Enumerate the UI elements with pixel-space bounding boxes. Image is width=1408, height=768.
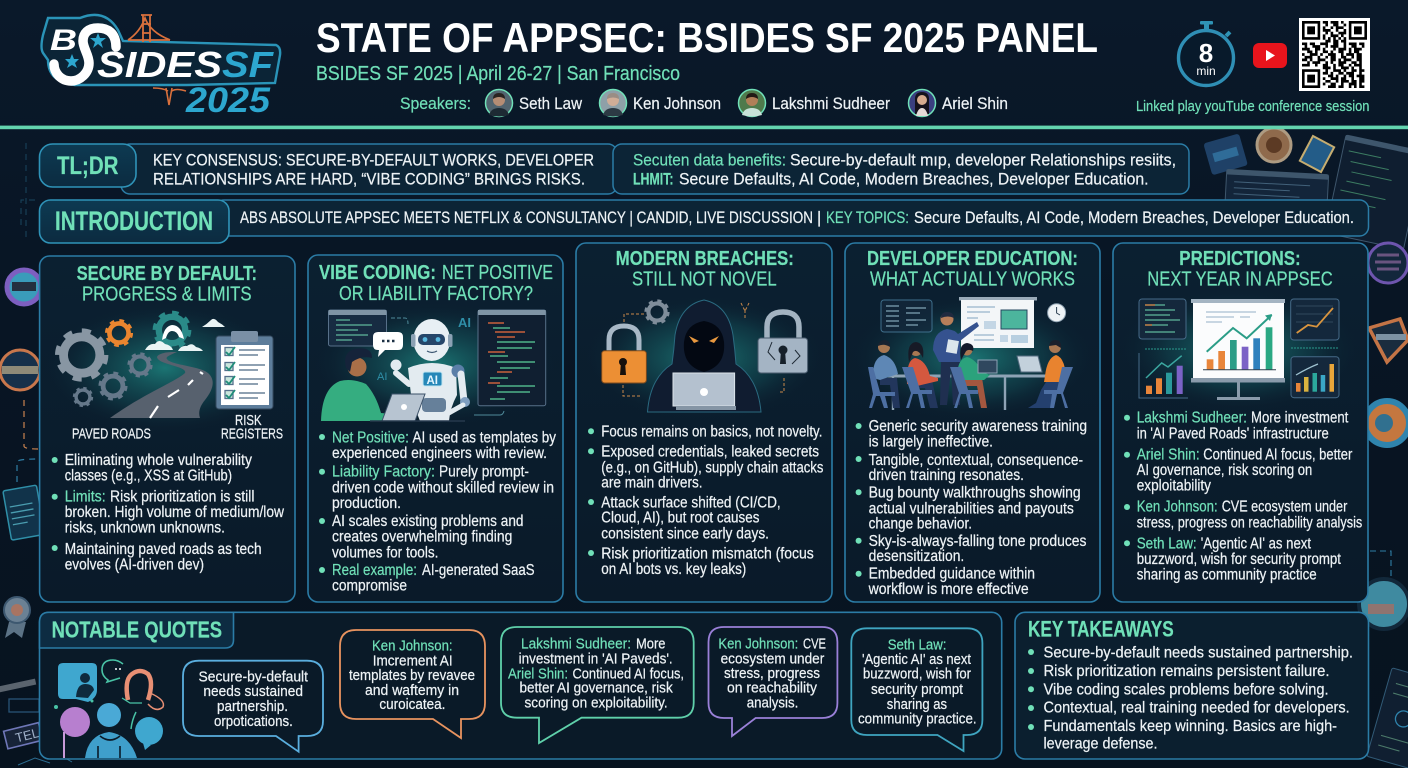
bullet list: predictions: 'Agentic AI' as next <box>1201 535 1312 552</box>
presenter <box>940 358 960 405</box>
quote bubble: Ken Johnson on CVE: ecosystem under <box>721 650 824 667</box>
TL;DR secondary box <box>613 144 1189 194</box>
bullet list: vibe coding: AI used as templates by <box>412 430 556 447</box>
TL;DR secondary box: LHMIT: <box>633 170 674 188</box>
quote bubble: Ken Johnson on CVE <box>708 627 837 736</box>
bullet list: predictions: exploitability <box>1137 478 1211 495</box>
bullet list: vibe coding: driven code without skilled review in <box>332 480 554 497</box>
introduction body box: KEY TOPICS: <box>826 209 909 227</box>
bullet list: vibe coding: AI-generated SaaS <box>422 562 535 579</box>
bullet list: vibe coding: Real example: <box>332 562 417 579</box>
panel: notable quotes <box>40 612 1002 759</box>
bullet list: modern breaches <box>588 424 824 578</box>
quote bubble: Lakshmi Sudheer and Ariel Shin: Ariel Shin: <box>508 665 568 682</box>
bullet list: key takeaways: Secure-by-default needs sustained partnership. <box>1044 645 1353 662</box>
bullet list: secure by default: Limits: <box>65 489 106 506</box>
panel: introduction <box>40 200 1368 243</box>
speakers row <box>400 90 1008 116</box>
quote bubble: Lakshmi Sudheer and Ariel Shin: investment in 'AI Paveds'. <box>519 650 673 667</box>
icon: 8 minute stopwatch: min <box>1196 64 1216 78</box>
speakers row: Speakers: <box>400 94 471 113</box>
bullet list: predictions: buzzword, wish for security prompt <box>1137 551 1342 568</box>
quote bubble: secure by default <box>183 661 323 752</box>
quote bubble: Lakshmi Sudheer and Ariel Shin: scoring on exploitability. <box>524 695 668 712</box>
label: risk registers: REGISTERS <box>221 427 283 443</box>
bullet list: predictions: Seth Law: <box>1137 535 1197 552</box>
quote bubble: secure by default: needs sustained <box>203 683 303 700</box>
illustration: hooded attacker and broken locks <box>584 296 824 420</box>
heading: key takeaways: KEY TAKEAWAYS <box>1028 617 1174 642</box>
logo: BSides SF 2025: SIDES <box>97 44 222 85</box>
quote bubble: Seth Law: sharing as <box>887 696 947 713</box>
bullet list: secure by default: risks, unknown unknowns. <box>65 520 225 537</box>
panel: key takeaways <box>1015 612 1368 759</box>
TL;DR badge <box>40 144 136 187</box>
bullet list: developer education: Bug bounty walkthroughs showing <box>869 485 1081 502</box>
bullet list: secure by default: classes (e.g., XSS at GitHub) <box>65 468 232 485</box>
bullet list: developer education: Sky-is-always-falling tone produces <box>869 533 1087 550</box>
bullet list: predictions: in 'AI Paved Roads' infrastructure <box>1137 425 1329 442</box>
panel: predictions <box>1113 243 1368 602</box>
TL;DR secondary box: Secuten data benefits: <box>633 151 786 170</box>
heading tab: notable quotes: NOTABLE QUOTES <box>52 617 222 643</box>
introduction badge: INTRODUCTION <box>55 206 213 236</box>
speaker: Lakshmi Sudheer: Lakshmi Sudheer <box>772 94 890 113</box>
introduction body box: ABS ABSOLUTE APPSEC MEETS NETFLIX & CONSULTANCY | CANDID, LIVE DISCUSSION <box>240 209 813 227</box>
bullet list: modern breaches: on AI bots vs. key leaks) <box>601 561 746 578</box>
quote bubble: Seth Law: community practice. <box>858 711 977 728</box>
bullet list: developer education: Generic security awareness training <box>869 418 1087 435</box>
bullet list: secure by default: Risk prioritization is still <box>110 489 254 506</box>
bullet list: vibe coding: Net Positive: <box>332 430 409 447</box>
bullet list: developer education <box>856 418 1087 598</box>
heading: modern breaches <box>616 247 794 291</box>
bullet list: vibe coding: Purely prompt- <box>439 464 529 481</box>
decorative stickers: left margin: TEL <box>14 725 41 745</box>
quote bubble: Ken Johnson: curoicatea. <box>379 696 445 713</box>
quote bubble: secure by default: orpotications. <box>214 713 293 730</box>
heading: modern breaches: MODERN BREACHES: <box>616 247 794 270</box>
TL;DR secondary box: Secure Defaults, AI Code, Modern Breaches, Developer Education. <box>679 170 1148 188</box>
quote bubble: Ken Johnson on CVE: Ken Johnson: <box>718 635 798 652</box>
bullet list: predictions: More investment <box>1251 410 1349 427</box>
person 3 and chair <box>965 378 987 408</box>
heading: vibe coding: NET POSITIVE <box>442 261 553 284</box>
illustration: developer pairing with AI robot: AI <box>458 315 471 330</box>
bullet list: key takeaways: Risk prioritization remains persistent failure. <box>1044 663 1330 680</box>
heading: developer education: WHAT ACTUALLY WORKS <box>870 268 1075 291</box>
heading: predictions <box>1147 247 1333 291</box>
bullet list: developer education: desensitization. <box>869 548 964 565</box>
quote bubble: Ken Johnson on CVE: stress, progress <box>724 665 820 682</box>
bullet list: predictions: Ken Johnson: <box>1137 499 1218 516</box>
heading: predictions: PREDICTIONS: <box>1179 247 1301 270</box>
bullet list: secure by default <box>52 452 285 573</box>
TL;DR body box <box>121 144 617 194</box>
speaker: Lakshmi Sudheer <box>738 90 890 116</box>
bullet list: developer education: actual vulnerabilities and payouts <box>869 500 1074 517</box>
bullet list: key takeaways: leverage defense. <box>1044 735 1158 752</box>
quote bubble: secure by default: partnership. <box>217 698 288 715</box>
speaker: Ariel Shin <box>908 90 1008 116</box>
bullet list: developer education: workflow is more effective <box>868 581 1029 598</box>
illustration: gears, paved road and risk register clipboard <box>43 302 287 434</box>
heading: vibe coding: VIBE CODING: <box>319 261 436 284</box>
illustration: developer pairing with AI robot: AI <box>426 375 438 387</box>
label: paved roads: PAVED ROADS <box>72 427 151 443</box>
heading: developer education <box>867 247 1078 291</box>
illustration: developer pairing with AI robot <box>313 302 557 426</box>
quote bubble: Lakshmi Sudheer and Ariel Shin: Lakshmi Sudheer: <box>521 635 631 652</box>
bullet list: vibe coding: creates overwhelming finding <box>332 529 512 546</box>
speaker: Ariel Shin: Ariel Shin <box>942 94 1008 113</box>
QR code <box>1299 18 1370 91</box>
quote bubble: Ken Johnson: and waftemy in <box>365 682 459 699</box>
bullet list: modern breaches: Focus remains on basics, not novelty. <box>601 424 822 441</box>
speaker: Seth Law <box>486 90 583 116</box>
TL;DR body box: KEY CONSENSUS: SECURE-BY-DEFAULT WORKS, DEVELOPER <box>153 151 594 170</box>
decorative stickers: top right <box>1203 128 1408 249</box>
bullet list: predictions: sharing as community practice <box>1137 566 1317 583</box>
icon: 8 minute stopwatch: 8 <box>1199 38 1213 68</box>
bullet list: predictions: Continued AI focus, better <box>1203 446 1352 463</box>
bullet list: predictions <box>1124 410 1362 583</box>
bullet list: secure by default: broken. High volume of medium/low <box>65 504 285 521</box>
heading: developer education: DEVELOPER EDUCATION: <box>867 247 1078 270</box>
bullet list: modern breaches: are main drivers. <box>601 475 703 492</box>
bullet list: secure by default: Maintaining paved roads as tech <box>65 541 262 558</box>
panel: vibe coding <box>308 255 563 602</box>
bullet list: predictions: stress, progress on reachability analysis <box>1137 514 1362 531</box>
bullet list: developer education: is largely ineffective. <box>869 434 993 451</box>
logo: BSides SF 2025: B <box>50 24 77 57</box>
introduction body box: | <box>817 209 821 227</box>
illustration: developer pairing with AI robot: AI <box>377 371 387 383</box>
quote bubble: Ken Johnson: templates by revavee <box>349 667 475 684</box>
caption: linked session: Linked play youTube conference session <box>1136 99 1370 115</box>
quote bubble: Seth Law: Seth Law: <box>888 636 946 653</box>
quote bubble: Ken Johnson on CVE: analysis. <box>747 695 798 712</box>
quote bubble: Seth Law: security prompt <box>871 681 964 698</box>
heading tab: notable quotes <box>40 612 234 648</box>
decorative stickers: left margin <box>0 143 72 765</box>
title: STATE OF APPSEC: BSIDES SF 2025 PANEL <box>316 14 1098 61</box>
bullet list: predictions: Lakshmi Sudheer: <box>1137 410 1247 427</box>
quote bubble: secure by default: Secure-by-default <box>198 669 309 686</box>
panel: secure by default <box>40 256 295 602</box>
heading: secure by default <box>77 262 257 306</box>
quote bubble: Ken Johnson: Imcrement AI <box>373 653 453 670</box>
introduction badge <box>40 200 229 243</box>
label: risk registers: RISK <box>235 413 262 429</box>
bullet list: vibe coding: AI scales existing problems and <box>332 513 524 530</box>
quote bubble: Seth Law: 'Agentic AI' as next <box>862 651 972 668</box>
bullet list: key takeaways: Contextual, real training needed for developers. <box>1044 700 1350 717</box>
TL;DR body box: RELATIONSHIPS ARE HARD, “VIBE CODING” BRINGS RISKS. <box>153 170 585 188</box>
TL;DR secondary box: Secure-by-default mıp, developer Relationships resiits, <box>790 151 1176 170</box>
quote bubble: Ken Johnson: Ken Johnson: <box>372 638 453 655</box>
bullet list: developer education: Embedded guidance within <box>869 565 1035 582</box>
bullet list: modern breaches: Exposed credentials, leaked secrets <box>601 444 819 461</box>
panel: developer education <box>845 243 1100 602</box>
label: risk registers <box>221 413 283 443</box>
bullet list: modern breaches: consistent since early days. <box>601 525 769 542</box>
introduction body box: Secure Defaults, AI Code, Modern Breaches, Developer Education. <box>914 209 1354 227</box>
decorative stickers: right margin <box>1359 243 1408 768</box>
bullet list: key takeaways: Vibe coding scales problems before solving. <box>1044 681 1329 698</box>
bullet list: secure by default: Eliminating whole vulnerability <box>65 452 252 469</box>
illustration: training session around a table <box>850 296 1094 420</box>
speech bubble <box>373 332 403 357</box>
laptop <box>382 394 425 421</box>
bullet list: modern breaches: (e.g., on GitHub), supply chain attacks <box>601 459 824 476</box>
icon: 8 minute stopwatch <box>1178 21 1234 86</box>
heading: modern breaches: STILL NOT NOVEL <box>632 268 777 291</box>
heading: predictions: NEXT YEAR IN APPSEC <box>1147 268 1333 291</box>
heading: secure by default: SECURE BY DEFAULT: <box>77 262 257 285</box>
bullet list: modern breaches: Cloud, AI), but root causes <box>601 510 760 527</box>
bullet list: vibe coding: volumes for tools. <box>332 544 438 561</box>
quote bubble: Ken Johnson on CVE: CVE <box>803 635 826 652</box>
bullet list: developer education: change behavior. <box>869 515 972 532</box>
robot <box>408 363 457 421</box>
quote bubble: Lakshmi Sudheer and Ariel Shin: Continued AI focus, <box>572 665 684 682</box>
bullet list: vibe coding: compromise <box>332 578 407 595</box>
heading: vibe coding: OR LIABILITY FACTORY? <box>339 282 533 305</box>
bullet list: modern breaches: Attack surface shifted (CI/CD, <box>601 494 781 511</box>
panel: TL;DR <box>40 144 1189 194</box>
person 2 and chair <box>912 380 938 408</box>
bullet list: modern breaches: Risk prioritization mismatch (focus <box>601 545 814 562</box>
icon: group of speakers with speech bubbles <box>54 660 163 758</box>
bullet list: key takeaways <box>1028 645 1353 752</box>
heading: vibe coding <box>319 261 553 305</box>
bullet list: vibe coding: production. <box>332 495 401 512</box>
speaker: Ken Johnson <box>600 90 721 116</box>
quote bubble: Lakshmi Sudheer and Ariel Shin: More <box>636 635 666 652</box>
bullet list: secure by default: evolves (AI-driven dev) <box>65 556 204 573</box>
subtitle: event details: BSIDES SF 2025 | April 26-27 | San Francisco <box>316 63 680 85</box>
introduction body box <box>215 200 1368 236</box>
speaker: Ken Johnson: Ken Johnson <box>633 94 721 113</box>
person 4 and chair <box>1028 382 1062 408</box>
bullet list: predictions: Ariel Shin: <box>1137 446 1200 463</box>
bullet list: predictions: CVE ecosystem under <box>1222 499 1347 516</box>
header divider <box>0 126 1408 129</box>
bullet list: vibe coding: experienced engineers with review. <box>332 445 547 462</box>
bullet list: predictions: AI governance, risk scoring on <box>1137 462 1312 479</box>
icon: YouTube play button <box>1253 43 1287 68</box>
quote bubble: Lakshmi Sudheer and Ariel Shin: better AI governance, risk <box>520 680 673 697</box>
person 1 and chair <box>880 378 900 408</box>
bullet list: developer education: driven training resonates. <box>869 467 1024 484</box>
bullet list: developer education: Tangible, contextual, consequence- <box>869 452 1083 469</box>
table <box>887 374 1050 378</box>
logo: BSides SF 2025: SF <box>222 44 274 85</box>
bullet list: vibe coding: Liability Factory: <box>332 464 435 481</box>
bullet list: key takeaways: Fundamentals keep winning. Basics are high- <box>1044 718 1337 735</box>
TL;DR badge: TL;DR <box>57 152 118 180</box>
quote bubble: Lakshmi Sudheer and Ariel Shin <box>501 627 694 743</box>
quote bubble: Ken Johnson on CVE: on reachability <box>727 680 817 697</box>
illustration: growth charts on presentation screen <box>1119 288 1359 412</box>
quote bubble: Seth Law: buzzword, wish for <box>863 666 971 683</box>
bullet list: vibe coding <box>319 430 556 595</box>
quote bubble: Seth Law <box>851 628 982 751</box>
quote bubble: Ken Johnson <box>340 630 485 738</box>
speaker: Seth Law: Seth Law <box>519 94 583 113</box>
heading: secure by default: PROGRESS & LIMITS <box>82 283 252 306</box>
logo: BSides SF 2025 <box>42 15 280 120</box>
person <box>321 380 392 421</box>
panel: modern breaches <box>576 243 832 602</box>
logo: BSides SF 2025: 2025 <box>185 81 271 120</box>
